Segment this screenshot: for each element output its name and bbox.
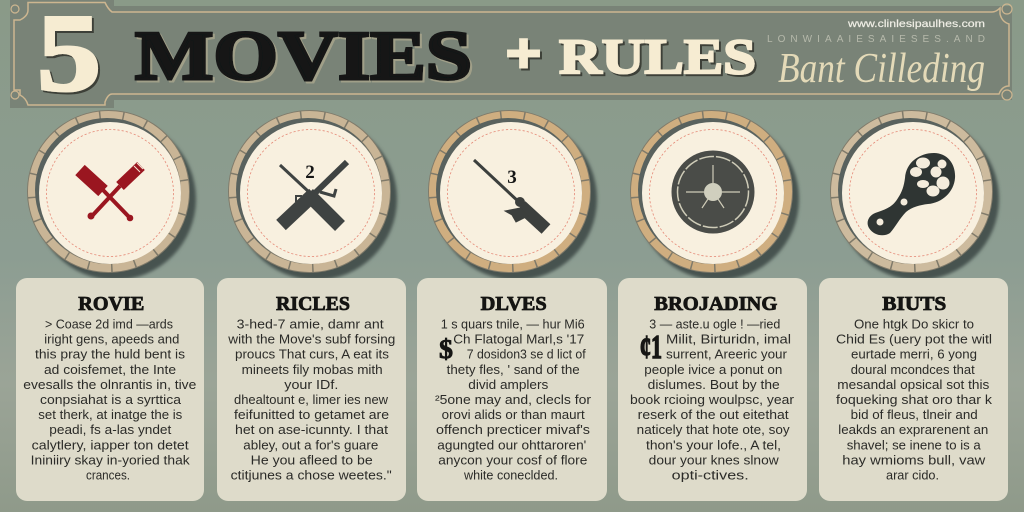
body text: ²5one may and, clecls for	[435, 392, 592, 407]
icon: red paddle and fork	[80, 163, 143, 221]
title: rules: RULES	[559, 28, 756, 84]
body text: arar cido.	[886, 468, 939, 482]
body text: shavel; se inene to is a	[847, 437, 981, 452]
tagline: LONWIAAIESAIESES.AND	[767, 34, 985, 45]
body text: divid amplers	[468, 377, 549, 392]
icon: ornate paddle	[868, 153, 955, 235]
body text: dhealtount e, limer ies new	[234, 392, 388, 407]
body text: orovi alids or than maurt	[442, 407, 585, 422]
medallion 4: wheel	[630, 110, 799, 280]
drop cap one: ¢1	[640, 329, 662, 366]
card 4: broading	[618, 278, 807, 501]
medallion 1: red crossed tools	[27, 110, 196, 280]
body text: dour your knes slnow	[649, 452, 779, 467]
heading: BIUTS	[882, 294, 946, 315]
body text: surrent, Areeric your	[666, 347, 788, 362]
body text: your IDf.	[284, 377, 338, 392]
body text: people ivice a ponut on	[644, 362, 782, 377]
number 3: 3	[507, 167, 517, 188]
header banner	[10, 0, 1012, 114]
body text: thon's your lofe., A tel,	[646, 437, 781, 452]
body text: white coneclded.	[463, 468, 558, 482]
body text: 3-hed-7 amie, damr ant	[237, 316, 384, 332]
body text: set therk, at inatge the is	[38, 407, 183, 422]
title: movies: MOVIES	[135, 18, 472, 95]
body text: dislumes. Bout by the	[648, 377, 780, 392]
body text: mineets fily mobas mith	[242, 362, 383, 377]
body text: anycon your cosf of flore	[438, 452, 587, 467]
body text: mesandal opsical sot this	[837, 377, 990, 392]
body text	[435, 316, 592, 482]
icon: wheel disc	[672, 150, 754, 234]
medallion 5: paddle brush	[830, 110, 999, 280]
body text: Ininiiry skay in-yoried thak	[31, 452, 190, 467]
body text: thety fles, ' sand of the	[447, 362, 580, 377]
body text: agungted our ohttaroren'	[437, 437, 586, 452]
banner gold frame	[14, 2, 1009, 105]
body text: offench precticer mivaf's	[436, 422, 590, 437]
icon: rifle	[474, 160, 546, 229]
body text: ad coisfemet, the Inte	[44, 362, 176, 377]
heading: BROJADING	[654, 294, 777, 315]
medallion 2: dark crossed rifles	[228, 110, 397, 280]
body text: crances.	[86, 468, 130, 482]
title: plus: +	[506, 23, 541, 85]
body text: opti-ctives.	[672, 468, 749, 482]
script subtitle: Bant Cilleding	[778, 46, 985, 92]
body text: book rcioing woulpsc, year	[630, 392, 795, 407]
body text	[836, 316, 992, 482]
body text: bid of fleus, tlneir and	[851, 407, 978, 422]
corner ornaments	[11, 5, 19, 13]
body text	[227, 316, 395, 482]
number 2: 2	[305, 162, 315, 183]
body text: foqueking shat oro thar k	[836, 392, 992, 407]
banner plate	[10, 0, 1012, 108]
heading: ROVIE	[78, 294, 144, 315]
body text: abley, out a for's guare	[243, 437, 378, 452]
body text: proucs That curs, A eat its	[235, 347, 389, 362]
body text: reserk of the out eitethat	[638, 407, 789, 422]
body text: > Coase 2d imd —ards	[45, 316, 173, 332]
body text: Ch Flatogal Marl,s '17	[453, 332, 584, 347]
website: www.clinlesipaulhes.com	[847, 18, 985, 30]
body text: iright gens, apeeds and	[44, 332, 179, 347]
medallion 3: single rifle	[428, 110, 597, 280]
body text: hay wmioms bull, vaw	[842, 452, 986, 467]
body text: calytlery, iapper ton detet	[32, 437, 189, 452]
body text: ctitjunes a chose weetes."	[231, 468, 392, 482]
body text: this pray the huld bent is	[35, 347, 185, 362]
body text: evesalls the olnrantis in, tive	[23, 377, 196, 392]
card 2: ricles	[217, 278, 406, 501]
body text: naticely that hote ote, soy	[637, 422, 790, 437]
body text	[23, 316, 196, 482]
body text: het on ase-icunnty. I that	[235, 422, 388, 437]
body text: Milit, Birturidn, imal	[666, 332, 791, 347]
body text: peadi, fs a-las yndet	[49, 422, 172, 437]
body text: eurtade merri, 6 yong	[851, 347, 977, 362]
body text: One htgk Do skicr to	[854, 316, 974, 332]
heading: RICLES	[276, 294, 350, 315]
body text	[630, 316, 795, 482]
body text: 7 dosidon3 se d lict of	[467, 347, 586, 362]
body text: 1 s quars tnile, — hur Mi6	[441, 316, 585, 332]
body text: 3 — aste.u ogle ! —ried	[649, 316, 780, 332]
card 5: biuts	[819, 278, 1008, 501]
body text: feifunitted to getamet are	[234, 407, 389, 422]
body text: conpsiahat is a syrttica	[40, 392, 182, 407]
body text: doural mcondces that	[851, 362, 975, 377]
icon: crossed rifles	[280, 162, 347, 226]
heading: DLVES	[481, 294, 547, 315]
card 1: rovie	[16, 278, 204, 501]
body text: Chid Es (uery pot the witl	[836, 332, 992, 347]
drop cap dollar: $	[439, 334, 453, 364]
body text: with the Move's subf forsing	[227, 332, 395, 347]
body text: leakds an exprarenent an	[838, 422, 988, 437]
card 3: dlves	[417, 278, 607, 501]
body text: He you afleed to be	[251, 452, 373, 467]
